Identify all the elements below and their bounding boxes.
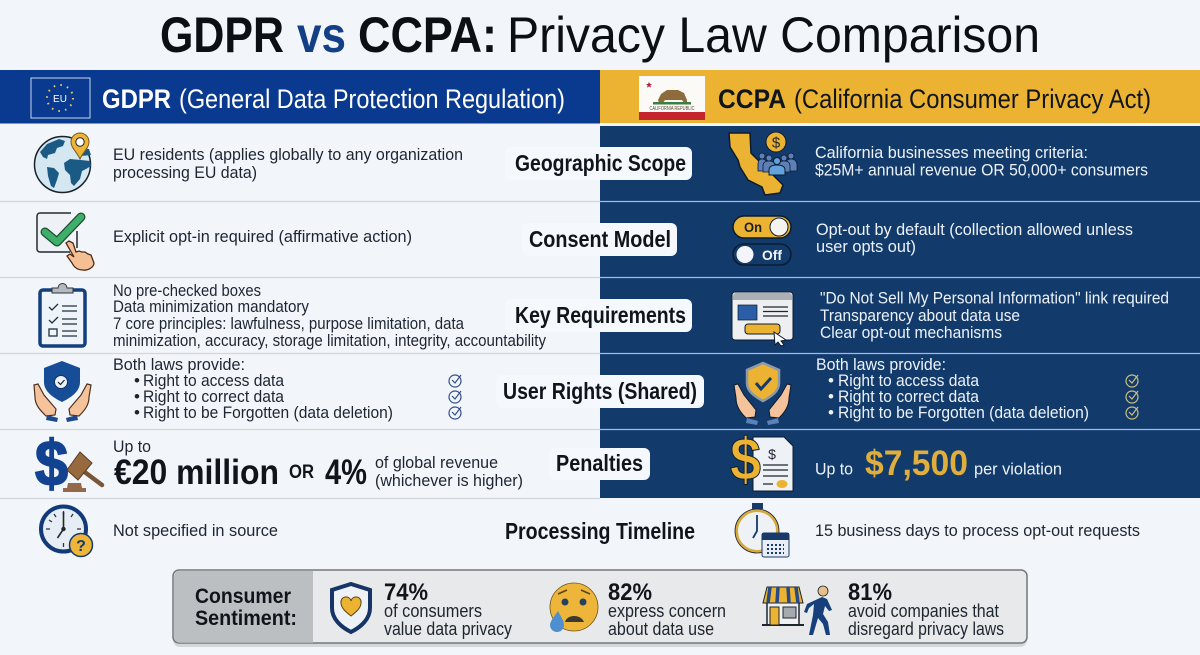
title: CCPA: — [358, 7, 497, 63]
icons: right check marks — [1126, 375, 1138, 419]
icon: worried face — [550, 583, 598, 632]
row 5 label: Penalties: Penalties — [556, 450, 643, 476]
panel: CCPA header: (California Consumer Privacy Act) — [794, 84, 1151, 114]
panel: GDPR header — [0, 70, 600, 124]
row 6 left: timeline text: Not specified in source — [113, 521, 278, 540]
row 4 left: user rights text: Right to access data — [143, 371, 284, 390]
row 2 right: consent text: Opt-out by default (collection allowed unless — [816, 220, 1133, 239]
panel: GDPR header: (General Data Protection Regulation) — [179, 84, 565, 114]
row 4 left: user rights text: Right to correct data — [143, 387, 284, 406]
row 1 label: Geographic Scope — [505, 147, 692, 180]
row 6 label: Processing Timeline: Processing Timeline — [505, 518, 695, 544]
title: GDPR — [160, 7, 284, 63]
row 3 right: requirements text: "Do Not Sell My Personal Information" link required — [820, 288, 1169, 308]
stat: 74%: 74% — [384, 579, 428, 606]
stat: 82%: 82% — [608, 579, 652, 606]
panel: GDPR header: GDPR — [102, 84, 171, 114]
row 2 right: consent text: user opts out) — [816, 237, 916, 256]
icon: dollar and document — [730, 426, 793, 493]
icon: dollar and gavel — [35, 427, 102, 499]
row 3 left: requirements text: No pre-checked boxes — [113, 281, 261, 300]
row 3 right: requirements text: Transparency about data use — [820, 306, 1020, 325]
row 4 left: user rights text — [113, 355, 393, 422]
stat: 81%: disregard privacy laws — [848, 619, 1004, 639]
row 1 left: scope text: EU residents (applies globally to any organization — [113, 145, 463, 164]
row 5 left: penalty text: OR — [289, 462, 314, 483]
stat: 81%: avoid companies that — [848, 601, 999, 621]
panel: CCPA header: CCPA — [718, 84, 786, 114]
panel: CCPA background — [600, 126, 1200, 498]
row 4 left: user rights text: Right to be Forgotten (data deletion) — [143, 403, 393, 422]
row 1 right: scope text — [815, 143, 1148, 180]
icon: California with people — [729, 132, 797, 195]
row 4 right: user rights text: Right to access data — [838, 371, 979, 390]
row 3 label: Key Requirements — [505, 299, 692, 332]
icon: checkbox with hand — [37, 213, 94, 270]
row 4 left: user rights text: • — [134, 371, 140, 390]
row 1 left: scope text — [113, 145, 463, 182]
icon: clipboard checklist — [40, 284, 85, 346]
stat: 74%: value data privacy — [384, 619, 512, 639]
row 2 right: consent text — [816, 220, 1133, 256]
icon: stopwatch with calendar — [735, 503, 789, 557]
row 4 right: user rights text: • — [828, 387, 834, 406]
row 4 right: user rights text: • — [828, 371, 834, 390]
row 4 left: user rights text: • — [134, 387, 140, 406]
row 3 right: requirements text: Clear opt-out mechanisms — [820, 323, 1002, 342]
row 6 right: timeline text: 15 business days to process opt-out requests — [815, 521, 1140, 540]
icons: left check marks — [449, 375, 461, 419]
panel: CCPA header — [600, 70, 1200, 123]
row 3 label: Key Requirements: Key Requirements — [515, 302, 686, 328]
stat: 82%: about data use — [608, 619, 714, 639]
row 5 left: penalty text: 4% — [325, 453, 367, 492]
stat: 82%: express concern — [608, 601, 726, 621]
row 5 left: penalty text: (whichever is higher) — [375, 471, 523, 490]
panel: consumer sentiment — [173, 570, 1027, 647]
row 4 left: user rights text: Both laws provide: — [113, 355, 245, 374]
icon: dollar and gavel: $ — [35, 427, 68, 499]
icon: shield with heart — [332, 584, 370, 632]
row 5 right: penalty text: Up to — [815, 460, 853, 478]
icon: California with people: $ — [772, 134, 781, 152]
icon: California flag — [639, 76, 705, 120]
row 5 right: penalty text — [815, 444, 1062, 483]
heading: consumer sentiment: Consumer — [195, 585, 291, 608]
row 4 right: user rights text: Right to correct data — [838, 387, 979, 406]
stat: 74% — [384, 579, 512, 639]
icon: dollar and document: $ — [768, 446, 776, 462]
stat: 81% — [848, 579, 1004, 639]
row 4 label: User Rights (Shared): User Rights (Shared) — [503, 378, 697, 404]
row 4 right: user rights text: • — [828, 403, 834, 422]
icon: EU flag: EU — [53, 94, 67, 105]
icon: store and walking person — [762, 586, 832, 635]
row 1 right: scope text: California businesses meeting criteria: — [815, 143, 1088, 162]
row 1 left: scope text: processing EU data) — [113, 163, 257, 182]
row 2 label: Consent Model — [522, 223, 677, 256]
stat: 74%: of consumers — [384, 601, 482, 621]
row 3 left: requirements text: Data minimization mandatory — [113, 297, 309, 316]
row 5 right: penalty text: per violation — [974, 460, 1062, 478]
icon: on and off toggles — [733, 216, 791, 265]
row 2 left: consent text: Explicit opt-in required (affirmative action) — [113, 227, 412, 246]
icon: clock with question badge — [41, 506, 92, 556]
icon: browser with cursor — [732, 292, 793, 346]
title: vs — [297, 7, 346, 63]
icon: clock with question badge: ? — [76, 538, 86, 555]
stat: 81%: 81% — [848, 579, 892, 606]
row 4 right: user rights text: Right to be Forgotten (data deletion) — [838, 403, 1089, 422]
icon: globe with pin — [34, 133, 91, 192]
row 5 left: penalty text: €20 million — [114, 453, 279, 492]
icon: shield in hands — [34, 361, 91, 422]
heading: consumer sentiment — [195, 585, 297, 630]
icon: on and off toggles: Off — [762, 247, 782, 263]
stat: 82% — [608, 579, 726, 639]
row 5 left: penalty text — [113, 437, 523, 492]
row 4 right: user rights text — [816, 355, 1089, 422]
row 4 label: User Rights (Shared) — [496, 375, 704, 408]
row 1 label: Geographic Scope: Geographic Scope — [515, 150, 686, 176]
row 1 right: scope text: $25M+ annual revenue OR 50,000+ consumers — [815, 160, 1148, 180]
heading: consumer sentiment: Sentiment: — [195, 607, 297, 630]
row 5 right: penalty text: $7,500 — [865, 444, 968, 483]
row 3 right: requirements text — [820, 288, 1169, 342]
title — [160, 7, 1040, 63]
row 5 left: penalty text: Up to — [113, 437, 151, 456]
icon: gold shield in hands — [734, 363, 791, 425]
row 2 label: Consent Model: Consent Model — [529, 226, 671, 252]
row 4 right: user rights text: Both laws provide: — [816, 355, 946, 374]
icon: California flag: CALIFORNIA REPUBLIC — [650, 106, 695, 112]
icon: EU flag — [31, 78, 90, 118]
row 3 left: requirements text — [113, 281, 546, 350]
row 3 left: requirements text: minimization, accuracy, storage limitation, integrity, accountability — [113, 331, 546, 350]
title: Privacy Law Comparison — [507, 7, 1040, 63]
row 4 left: user rights text: • — [134, 403, 140, 422]
row 3 left: requirements text: 7 core principles: lawfulness, purpose limitation, data — [113, 314, 464, 333]
icon: dollar and document: $ — [730, 426, 761, 493]
icon: on and off toggles: On — [744, 219, 762, 235]
row 5 left: penalty text: of global revenue — [375, 453, 498, 472]
